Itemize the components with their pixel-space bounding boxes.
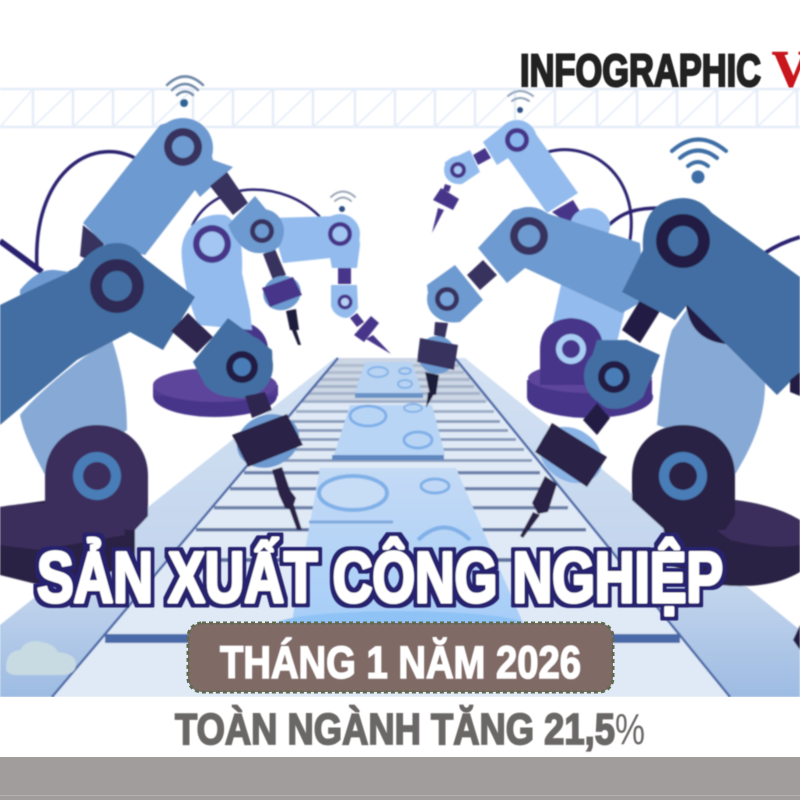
robot left: main arm (0, 243, 273, 425)
robot back-left: column and joint (182, 215, 252, 330)
wifi icon small left (331, 192, 355, 212)
edge fragment bottom right (793, 625, 800, 650)
robot top-left: upper arm (80, 118, 284, 262)
robot left: column (20, 340, 127, 485)
wifi icon large right (672, 140, 726, 184)
plate 2 (332, 404, 445, 460)
headline stat: TOÀN NGÀNH TĂNG 21,5 (175, 704, 615, 754)
month badge (188, 623, 613, 692)
robot right: middle arm (417, 207, 645, 408)
roof truss (0, 89, 800, 127)
month badge: THÁNG 1 NĂM 2026 (220, 637, 581, 688)
robot left: base with disc (0, 425, 148, 585)
robot right: main arm (583, 198, 800, 435)
robot back-right: column and base (527, 208, 653, 418)
robot right: tool head (520, 415, 613, 538)
robot left: tool head (229, 405, 307, 530)
headline stat: % (615, 705, 645, 754)
robot back-left: connector and tool (258, 249, 306, 345)
robot top-right: upper arm (432, 120, 584, 233)
conveyor belt (0, 358, 800, 697)
wifi icon left (167, 76, 203, 107)
background illustration (0, 76, 800, 697)
robot back-left: upper arm to the right (270, 214, 391, 354)
plate 1 (355, 362, 423, 398)
bottom grey band (0, 757, 800, 800)
cloud left (6, 641, 76, 675)
wifi icon small right (508, 91, 533, 113)
robot right: column (657, 305, 765, 478)
plate 3 (275, 468, 527, 639)
robot right: base with disc (632, 425, 800, 586)
bottom white strip (0, 697, 800, 757)
cables (0, 150, 800, 272)
robot back-left: base (153, 322, 278, 417)
